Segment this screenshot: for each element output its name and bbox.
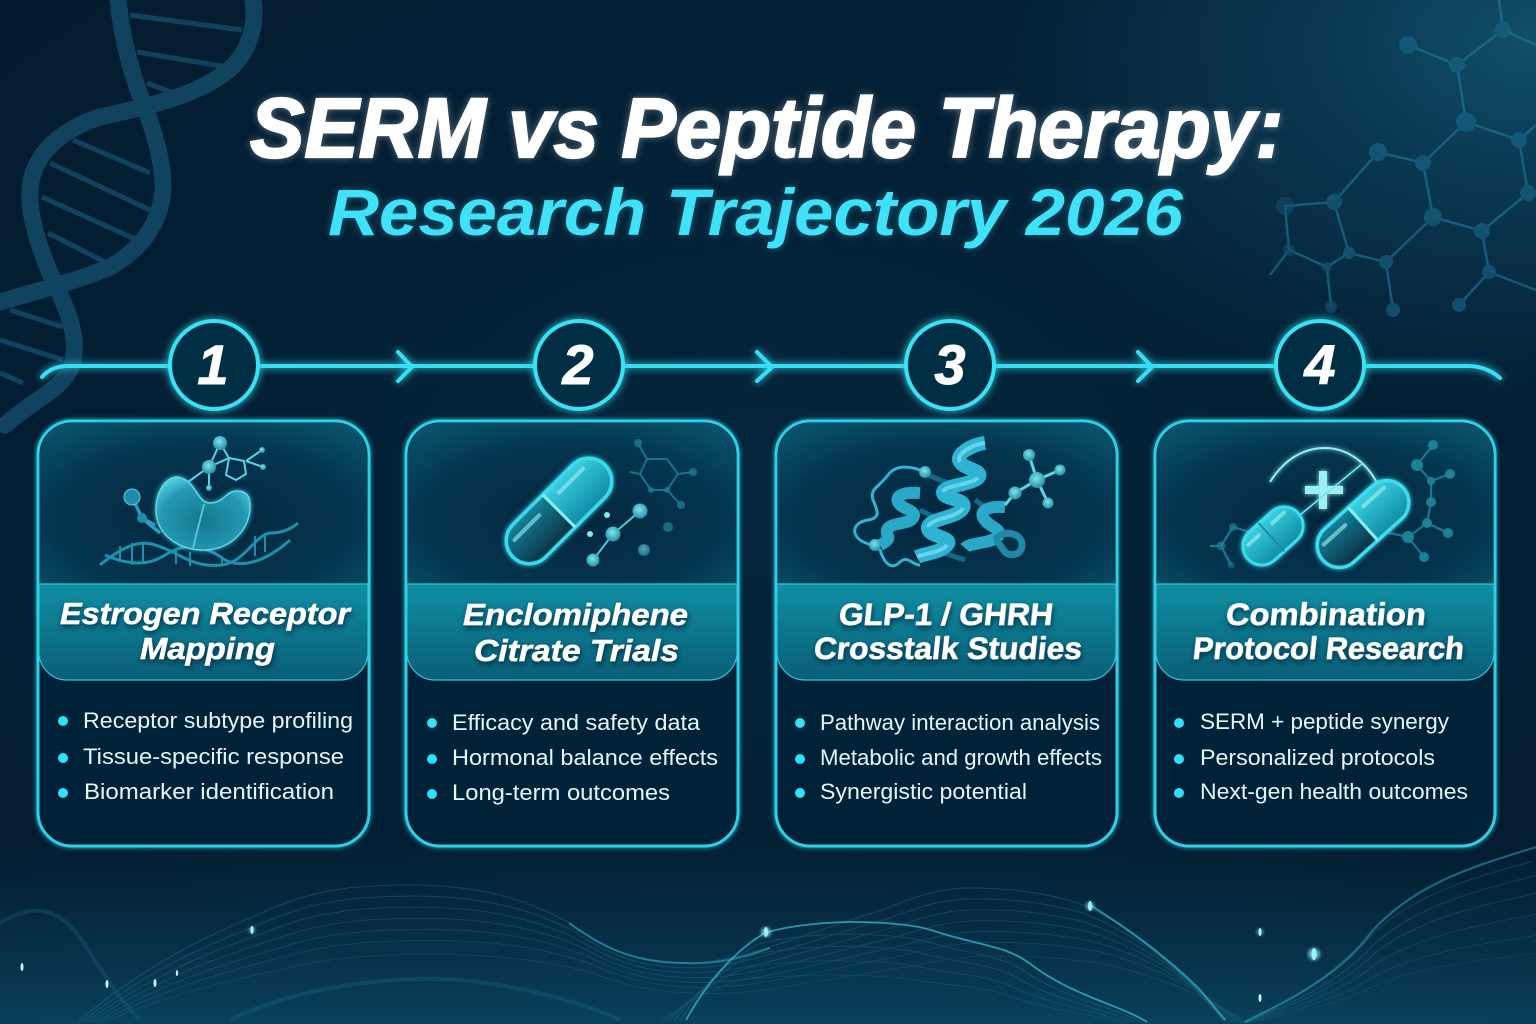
heading band bbox=[777, 584, 1116, 680]
panel: step 1 estrogen receptor mapping bbox=[38, 421, 369, 846]
bullet list bbox=[795, 710, 1102, 804]
bullet list: Synergistic potential bbox=[820, 779, 1027, 804]
heading band bbox=[1156, 584, 1494, 680]
background: DNA helix bbox=[0, 0, 254, 425]
background: flowing waves bbox=[0, 847, 1536, 1023]
step badge 3 bbox=[906, 321, 994, 409]
bullet list bbox=[1174, 709, 1468, 804]
timeline connector bbox=[42, 352, 1500, 381]
bullet list: SERM + peptide synergy bbox=[1200, 709, 1449, 734]
heading band: Estrogen Receptor bbox=[60, 596, 352, 631]
bullet list: Efficacy and safety data bbox=[452, 710, 701, 735]
heading band: GLP-1 / GHRH bbox=[837, 597, 1055, 632]
bullet list: Metabolic and growth effects bbox=[820, 745, 1102, 770]
step badge 3: 3 bbox=[934, 333, 966, 396]
heading band: Mapping bbox=[140, 631, 275, 666]
heading band: Enclomiphene bbox=[463, 597, 688, 632]
step badge 2: 2 bbox=[561, 333, 594, 396]
heading band bbox=[39, 584, 368, 680]
bullet list: Long-term outcomes bbox=[452, 780, 670, 805]
bullet list bbox=[427, 710, 718, 805]
arrow 1 bbox=[398, 352, 412, 381]
plus and arc bbox=[1270, 448, 1377, 515]
heading band: Protocol Research bbox=[1191, 631, 1466, 666]
title bbox=[250, 81, 1283, 249]
arrow 3 bbox=[1138, 352, 1152, 381]
bullet list: Pathway interaction analysis bbox=[820, 710, 1100, 735]
bullet list: Biomarker identification bbox=[84, 779, 334, 804]
panel: step 4 combination protocol research bbox=[1155, 421, 1495, 846]
icon: capsule with molecules bbox=[497, 439, 697, 573]
bullet list: Next-gen health outcomes bbox=[1200, 779, 1468, 804]
bullet list: Hormonal balance effects bbox=[452, 745, 718, 770]
bullet list: Tissue-specific response bbox=[83, 744, 344, 769]
title line 2: Research Trajectory 2026 bbox=[328, 175, 1184, 249]
background: hexagonal molecule network bbox=[1270, 0, 1536, 317]
icon: combined capsules with plus bbox=[1210, 440, 1455, 576]
heading band bbox=[407, 584, 737, 680]
heading band: Crosstalk Studies bbox=[812, 631, 1084, 666]
bullet list: Personalized protocols bbox=[1200, 745, 1435, 770]
step badge 1 bbox=[170, 321, 258, 409]
icon: receptor with DNA and molecule bbox=[100, 436, 298, 566]
panel: step 3 GLP-1 / GHRH crosstalk studies bbox=[776, 421, 1117, 846]
step badge 2 bbox=[535, 321, 623, 409]
icon: peptide helix with molecule bbox=[855, 443, 1066, 566]
panel: step 2 enclomiphene citrate trials bbox=[406, 421, 738, 846]
step badge 1: 1 bbox=[197, 333, 229, 396]
step badge 4 bbox=[1276, 321, 1364, 409]
heading band: Combination bbox=[1224, 597, 1428, 632]
bullet list bbox=[58, 708, 353, 804]
bullet list: Receptor subtype profiling bbox=[83, 708, 353, 733]
step badge 4: 4 bbox=[1303, 333, 1336, 396]
heading band: Citrate Trials bbox=[474, 633, 679, 668]
title line 1: SERM vs Peptide Therapy: bbox=[250, 81, 1283, 175]
arrow 2 bbox=[757, 352, 772, 381]
